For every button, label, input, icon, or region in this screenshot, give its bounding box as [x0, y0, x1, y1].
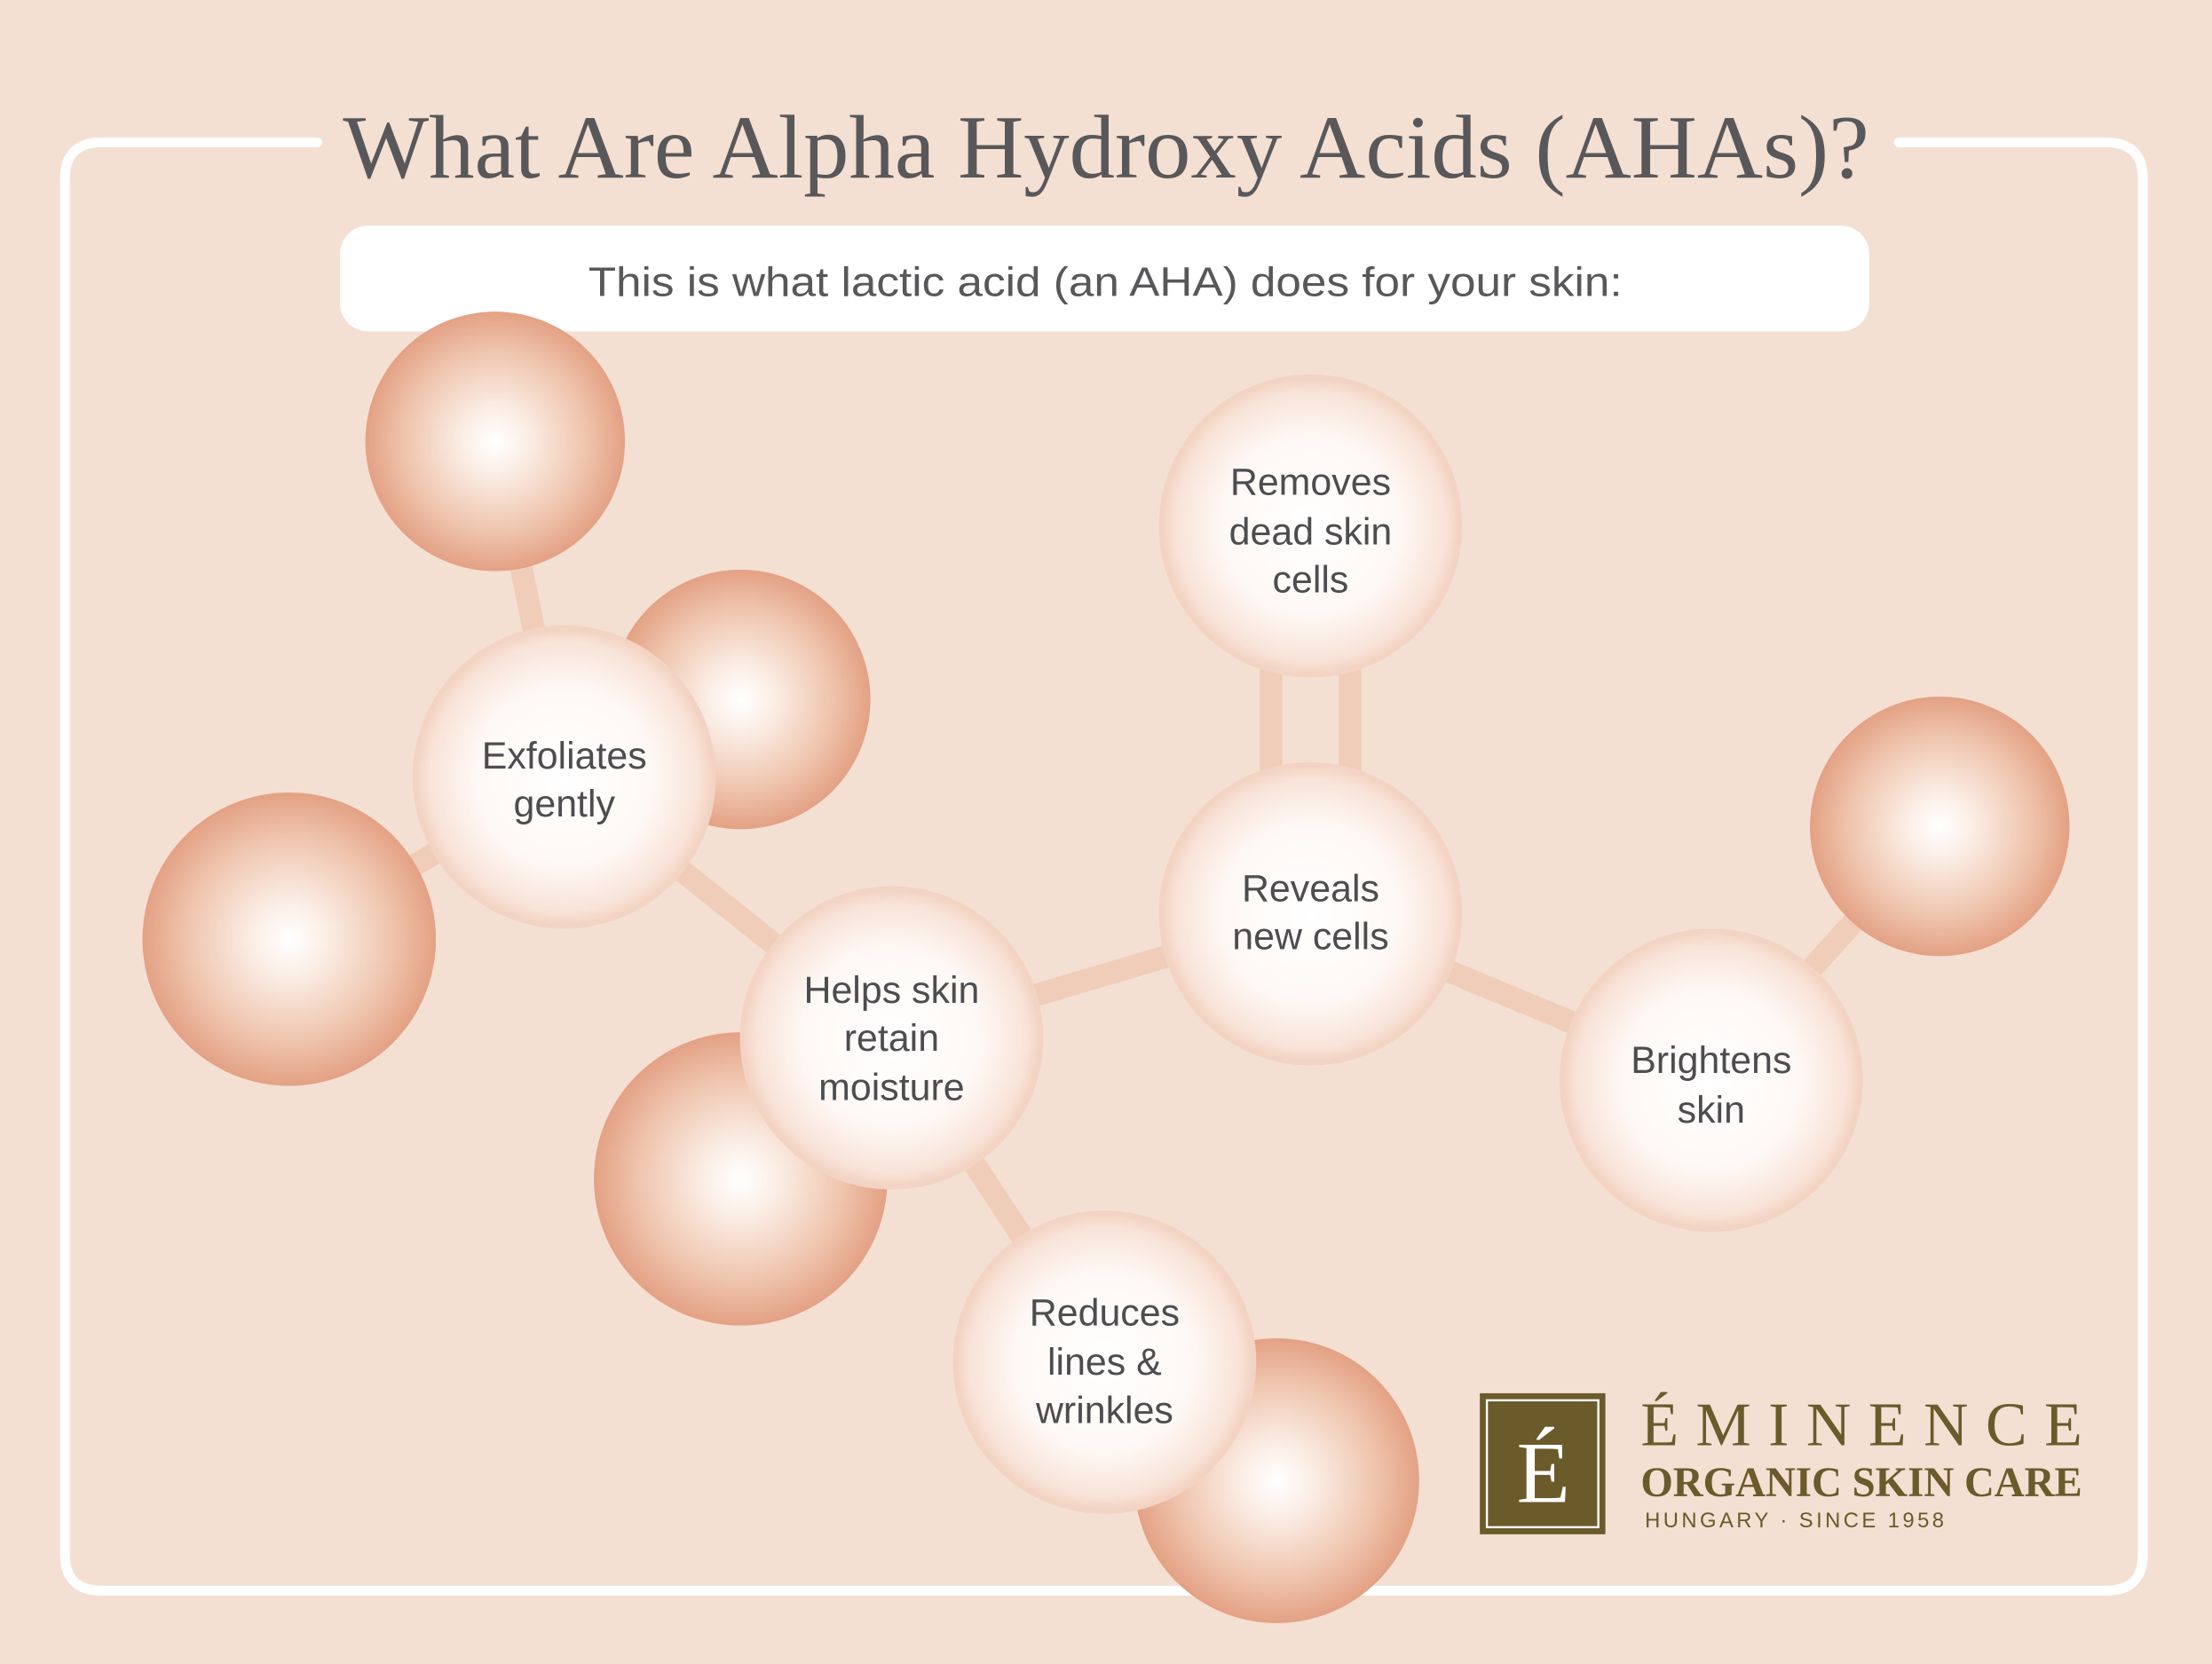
molecule diagram: lines & — [1047, 1341, 1162, 1384]
molecule diagram: Exfoliates — [482, 735, 647, 777]
labelled atoms — [415, 376, 1860, 1511]
logo: É — [1517, 1424, 1570, 1521]
molecule diagram: new cells — [1232, 915, 1389, 958]
molecule diagram: Reduces — [1030, 1292, 1180, 1335]
atom spheres — [143, 312, 2069, 1623]
logo: HUNGARY · SINCE 1958 — [1645, 1509, 1944, 1533]
molecule diagram: Brightens — [1631, 1039, 1791, 1082]
title: What Are Alpha Hydroxy Acids (AHAs)? — [343, 97, 1869, 197]
molecule diagram — [143, 312, 2069, 1623]
molecule diagram: skin — [1678, 1089, 1745, 1132]
molecule diagram: Helps skin — [803, 969, 979, 1012]
molecule diagram: Removes — [1230, 461, 1391, 504]
molecule diagram: gently — [513, 783, 615, 825]
subtitle box — [340, 225, 1869, 331]
molecule diagram: dead skin — [1229, 510, 1392, 553]
molecule diagram: wrinkles — [1035, 1389, 1173, 1431]
logo — [1480, 1392, 2082, 1534]
molecule diagram: retain — [844, 1017, 939, 1060]
molecule diagram: cells — [1273, 558, 1348, 601]
subtitle box: This is what lactic acid (an AHA) does for your skin: — [589, 259, 1623, 305]
logo: ÉMINENCE — [1640, 1392, 2082, 1460]
molecule diagram: Reveals — [1242, 867, 1379, 910]
molecule diagram: moisture — [818, 1066, 965, 1108]
logo: ORGANIC SKIN CARE — [1640, 1460, 2082, 1506]
